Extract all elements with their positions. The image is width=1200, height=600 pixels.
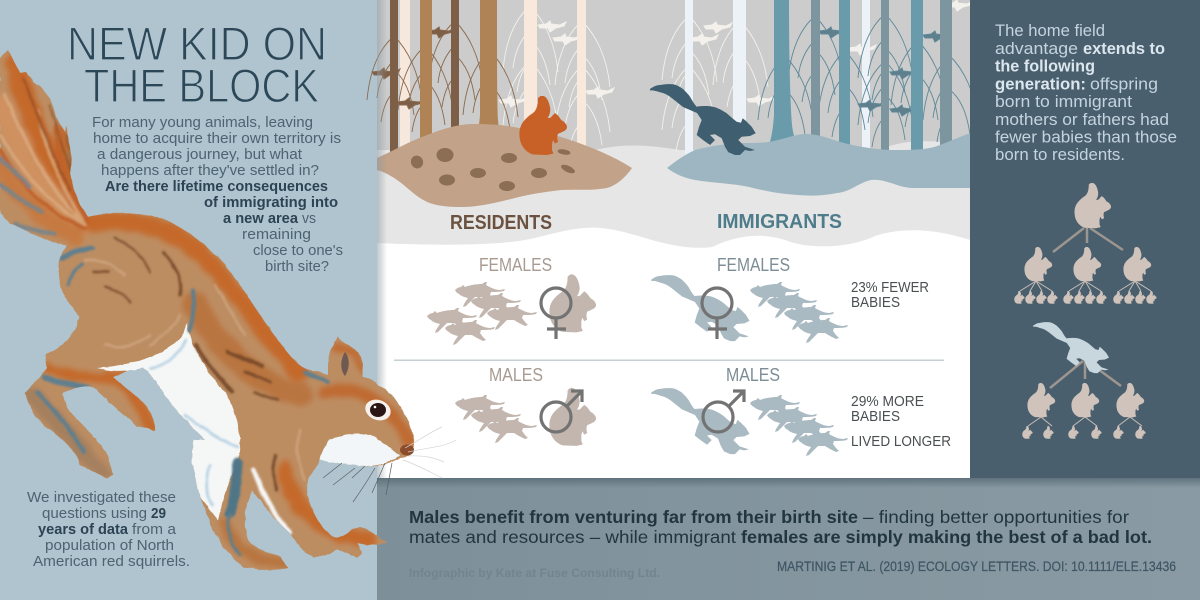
text: introduction: close to one's	[253, 243, 343, 259]
left panel background	[0, 0, 377, 600]
label: immigrant males: MALES	[726, 365, 780, 385]
text: methods	[27, 490, 190, 570]
body fur	[84, 258, 306, 481]
text: methods: from a	[132, 522, 177, 538]
text: methods: American red squirrels.	[33, 554, 190, 570]
text: home field advantage	[995, 22, 1177, 164]
squirrel whiskers	[323, 427, 456, 502]
text: methods: population of North	[45, 538, 174, 554]
icon: dark blue running squirrel	[650, 84, 756, 155]
heading: immigrants: IMMIGRANTS	[717, 211, 842, 233]
text: introduction: remaining	[242, 227, 311, 243]
stat: 29% more babies, lived longer: LIVED LONGER	[851, 434, 951, 450]
text: introduction: Are there lifetime consequences	[105, 179, 328, 195]
text: introduction: home to acquire their own territory is	[93, 131, 341, 147]
text: introduction: vs	[302, 211, 316, 227]
teal trees and branches	[758, 0, 978, 152]
tail fur	[0, 75, 88, 234]
credit: author: Infographic by Kate at Fuse Consulting Ltd.	[409, 566, 660, 580]
text: home field advantage: extends to	[1083, 40, 1165, 58]
text: introduction: of immigrating into	[204, 195, 338, 211]
panel: resident males	[455, 388, 596, 446]
stat: 23% fewer babies: BABIES	[851, 295, 900, 311]
stat: 29% more babies, lived longer	[851, 394, 951, 450]
text: home field advantage: The home field	[995, 22, 1105, 40]
label: immigrant females: FEMALES	[717, 255, 790, 275]
text: introduction: birth site?	[265, 259, 329, 275]
text: introduction	[92, 115, 343, 275]
text: home field advantage: generation:	[995, 75, 1086, 93]
label: resident males: MALES	[489, 365, 543, 385]
text: home field advantage: born to immigrant	[995, 93, 1132, 111]
title: THE BLOCK	[84, 59, 319, 112]
stat: 23% fewer babies: 23% FEWER	[851, 280, 929, 296]
text: home field advantage: born to residents.	[995, 146, 1125, 164]
text: methods: questions using	[42, 506, 147, 522]
text: home field advantage: fewer babies than those	[995, 128, 1177, 146]
stat: 29% more babies, lived longer: BABIES	[851, 409, 900, 425]
text: introduction: a dangerous journey, but what	[97, 147, 302, 163]
squirrel cheek	[320, 433, 400, 466]
text: home field advantage: offspring	[1090, 75, 1158, 93]
squirrel white belly and chest	[97, 323, 240, 520]
resident mound with burrows	[377, 124, 632, 207]
heading: residents: RESIDENTS	[450, 212, 552, 234]
title: NEW KID ON	[67, 17, 327, 70]
squirrel ear and nose	[341, 352, 414, 456]
squirrel eye	[362, 396, 394, 424]
pale resident and immigrant trees	[400, 0, 870, 156]
illustration: red squirrel	[0, 50, 456, 570]
text: methods: We investigated these	[27, 490, 176, 506]
text: introduction: a new area	[223, 211, 299, 227]
panel: forest scene and results background	[377, 0, 970, 478]
stat: 29% more babies, lived longer: 29% MORE	[851, 394, 924, 410]
text: conclusion: females are simply making the best of a bad lot.	[741, 527, 1152, 547]
squirrel fur strokes	[0, 75, 345, 555]
panel: conclusion	[377, 478, 1200, 600]
text: home field advantage: the following	[995, 58, 1095, 76]
panel: immigrant males	[651, 388, 848, 456]
text: methods: 29	[151, 506, 166, 522]
white branches	[499, 0, 973, 152]
text: methods: years of data	[38, 522, 129, 538]
text: home field advantage: advantage	[995, 40, 1078, 58]
chart: immigrant family tree	[1022, 322, 1146, 439]
brown trees and branches	[367, 0, 518, 155]
text: introduction: For many young animals, leaving	[92, 115, 313, 131]
shadow of left panel	[377, 0, 387, 478]
text: conclusion: – finding better opportunities for	[863, 507, 1129, 527]
chart: resident family tree	[1014, 183, 1157, 304]
title	[67, 17, 327, 112]
text: introduction: happens after they've settled in?	[101, 163, 319, 179]
text: conclusion	[409, 507, 1152, 547]
panel: resident females	[427, 274, 596, 345]
squirrel colour zones	[0, 65, 410, 563]
immigrant mound	[667, 133, 970, 196]
text: conclusion: Males benefit from venturing far from their birth site	[409, 507, 858, 527]
text: conclusion: mates and resources – while immigrant	[409, 527, 736, 547]
squirrel body	[0, 50, 414, 570]
panel: home field advantage	[970, 0, 1200, 478]
text: home field advantage: mothers or fathers had	[995, 111, 1169, 129]
stat: 23% fewer babies	[851, 280, 929, 311]
label: resident females: FEMALES	[479, 255, 552, 275]
panel: immigrant females	[651, 275, 848, 343]
icon: orange sitting squirrel	[519, 96, 567, 155]
